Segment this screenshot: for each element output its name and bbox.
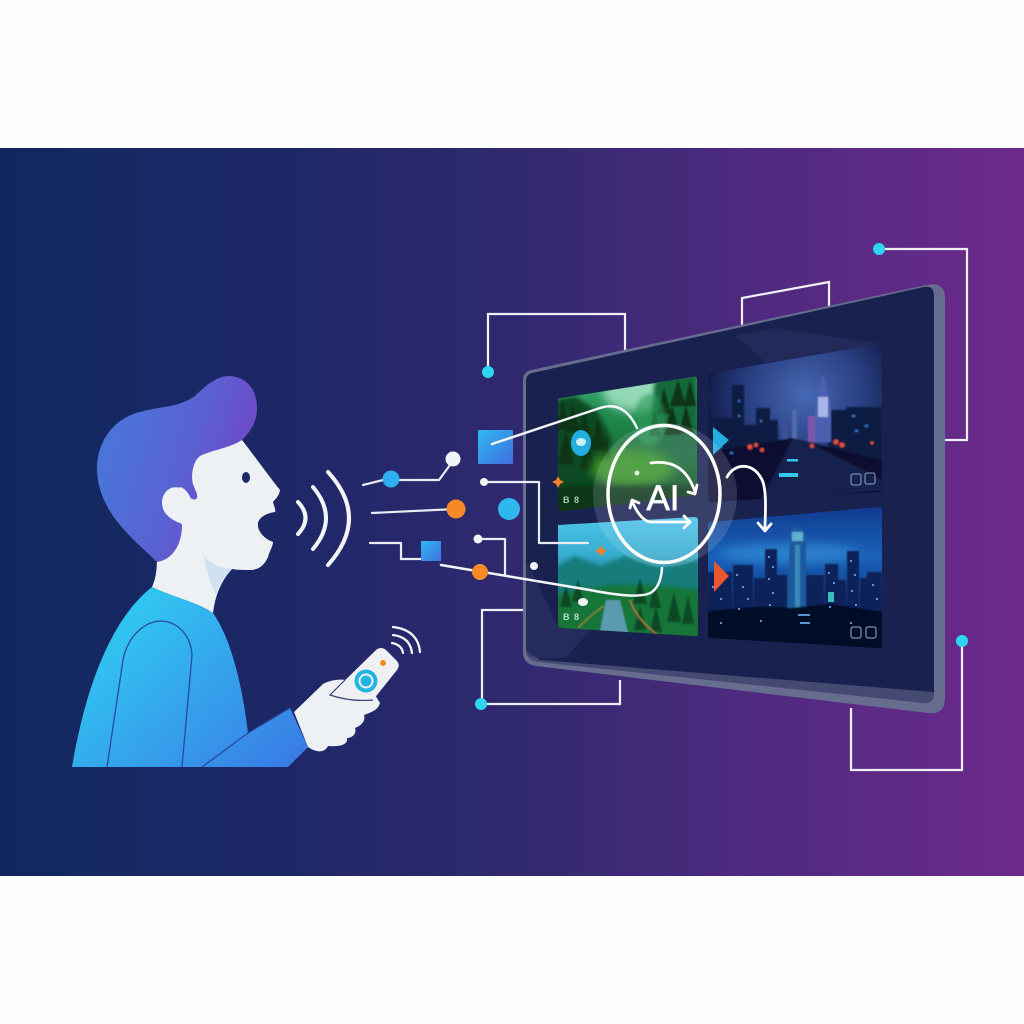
AI hub [593, 423, 737, 567]
infographic canvas [0, 148, 1024, 876]
hub halo [593, 423, 737, 567]
long curved links into the hub [441, 406, 662, 596]
play marker: blue [713, 427, 729, 455]
screen reflection [735, 328, 882, 368]
signal lines [363, 465, 588, 575]
remote button [354, 670, 378, 692]
hub arrows [630, 462, 697, 528]
lower left reflection [526, 560, 592, 658]
eye [242, 472, 250, 483]
curved arrow between tiles [727, 466, 771, 531]
remote body [330, 648, 399, 700]
lower bezel band [526, 648, 934, 703]
orange spark [552, 476, 564, 488]
blue node [382, 470, 400, 488]
shirt [72, 587, 308, 767]
skyline tile controls [851, 627, 876, 638]
white small node [474, 534, 482, 544]
person speaking [72, 376, 308, 767]
city tile controls [851, 473, 875, 485]
forest tile labels: B 8 [563, 495, 580, 505]
video tile: forest [558, 376, 697, 511]
orange node [472, 564, 488, 580]
voice waves [298, 472, 349, 565]
remote signal [392, 627, 420, 653]
orange spark [595, 545, 607, 557]
white small node [530, 562, 538, 570]
video tile: valley [555, 514, 701, 640]
white node [446, 452, 460, 466]
ear [162, 487, 190, 524]
neck shadow [204, 556, 232, 595]
gradient banner [0, 148, 1024, 876]
blue large node [498, 498, 520, 520]
location pin on forest tile [571, 430, 591, 488]
hand and remote [294, 627, 420, 751]
video tile: night city street [705, 342, 885, 506]
circuit connectors around the screen [482, 249, 967, 770]
connector end dots [475, 243, 968, 710]
tv screen [526, 287, 934, 703]
large blue square node [478, 430, 513, 464]
hair [97, 376, 257, 562]
small blue square node [421, 541, 441, 561]
video tile: blue skyline [705, 505, 885, 652]
neck and face [152, 435, 280, 613]
voice signal network [363, 406, 662, 606]
sleeve lines [107, 621, 290, 767]
smart TV [523, 284, 945, 713]
hand [294, 680, 380, 751]
orange node [446, 500, 466, 518]
hub label: AI [646, 479, 680, 518]
valley tile labels: B 8 [563, 612, 580, 622]
remote LED [380, 660, 386, 666]
white small node [480, 478, 488, 486]
play marker: orange [714, 561, 729, 592]
white small node [578, 598, 588, 606]
tv body [523, 284, 945, 713]
hub ring [608, 426, 720, 562]
